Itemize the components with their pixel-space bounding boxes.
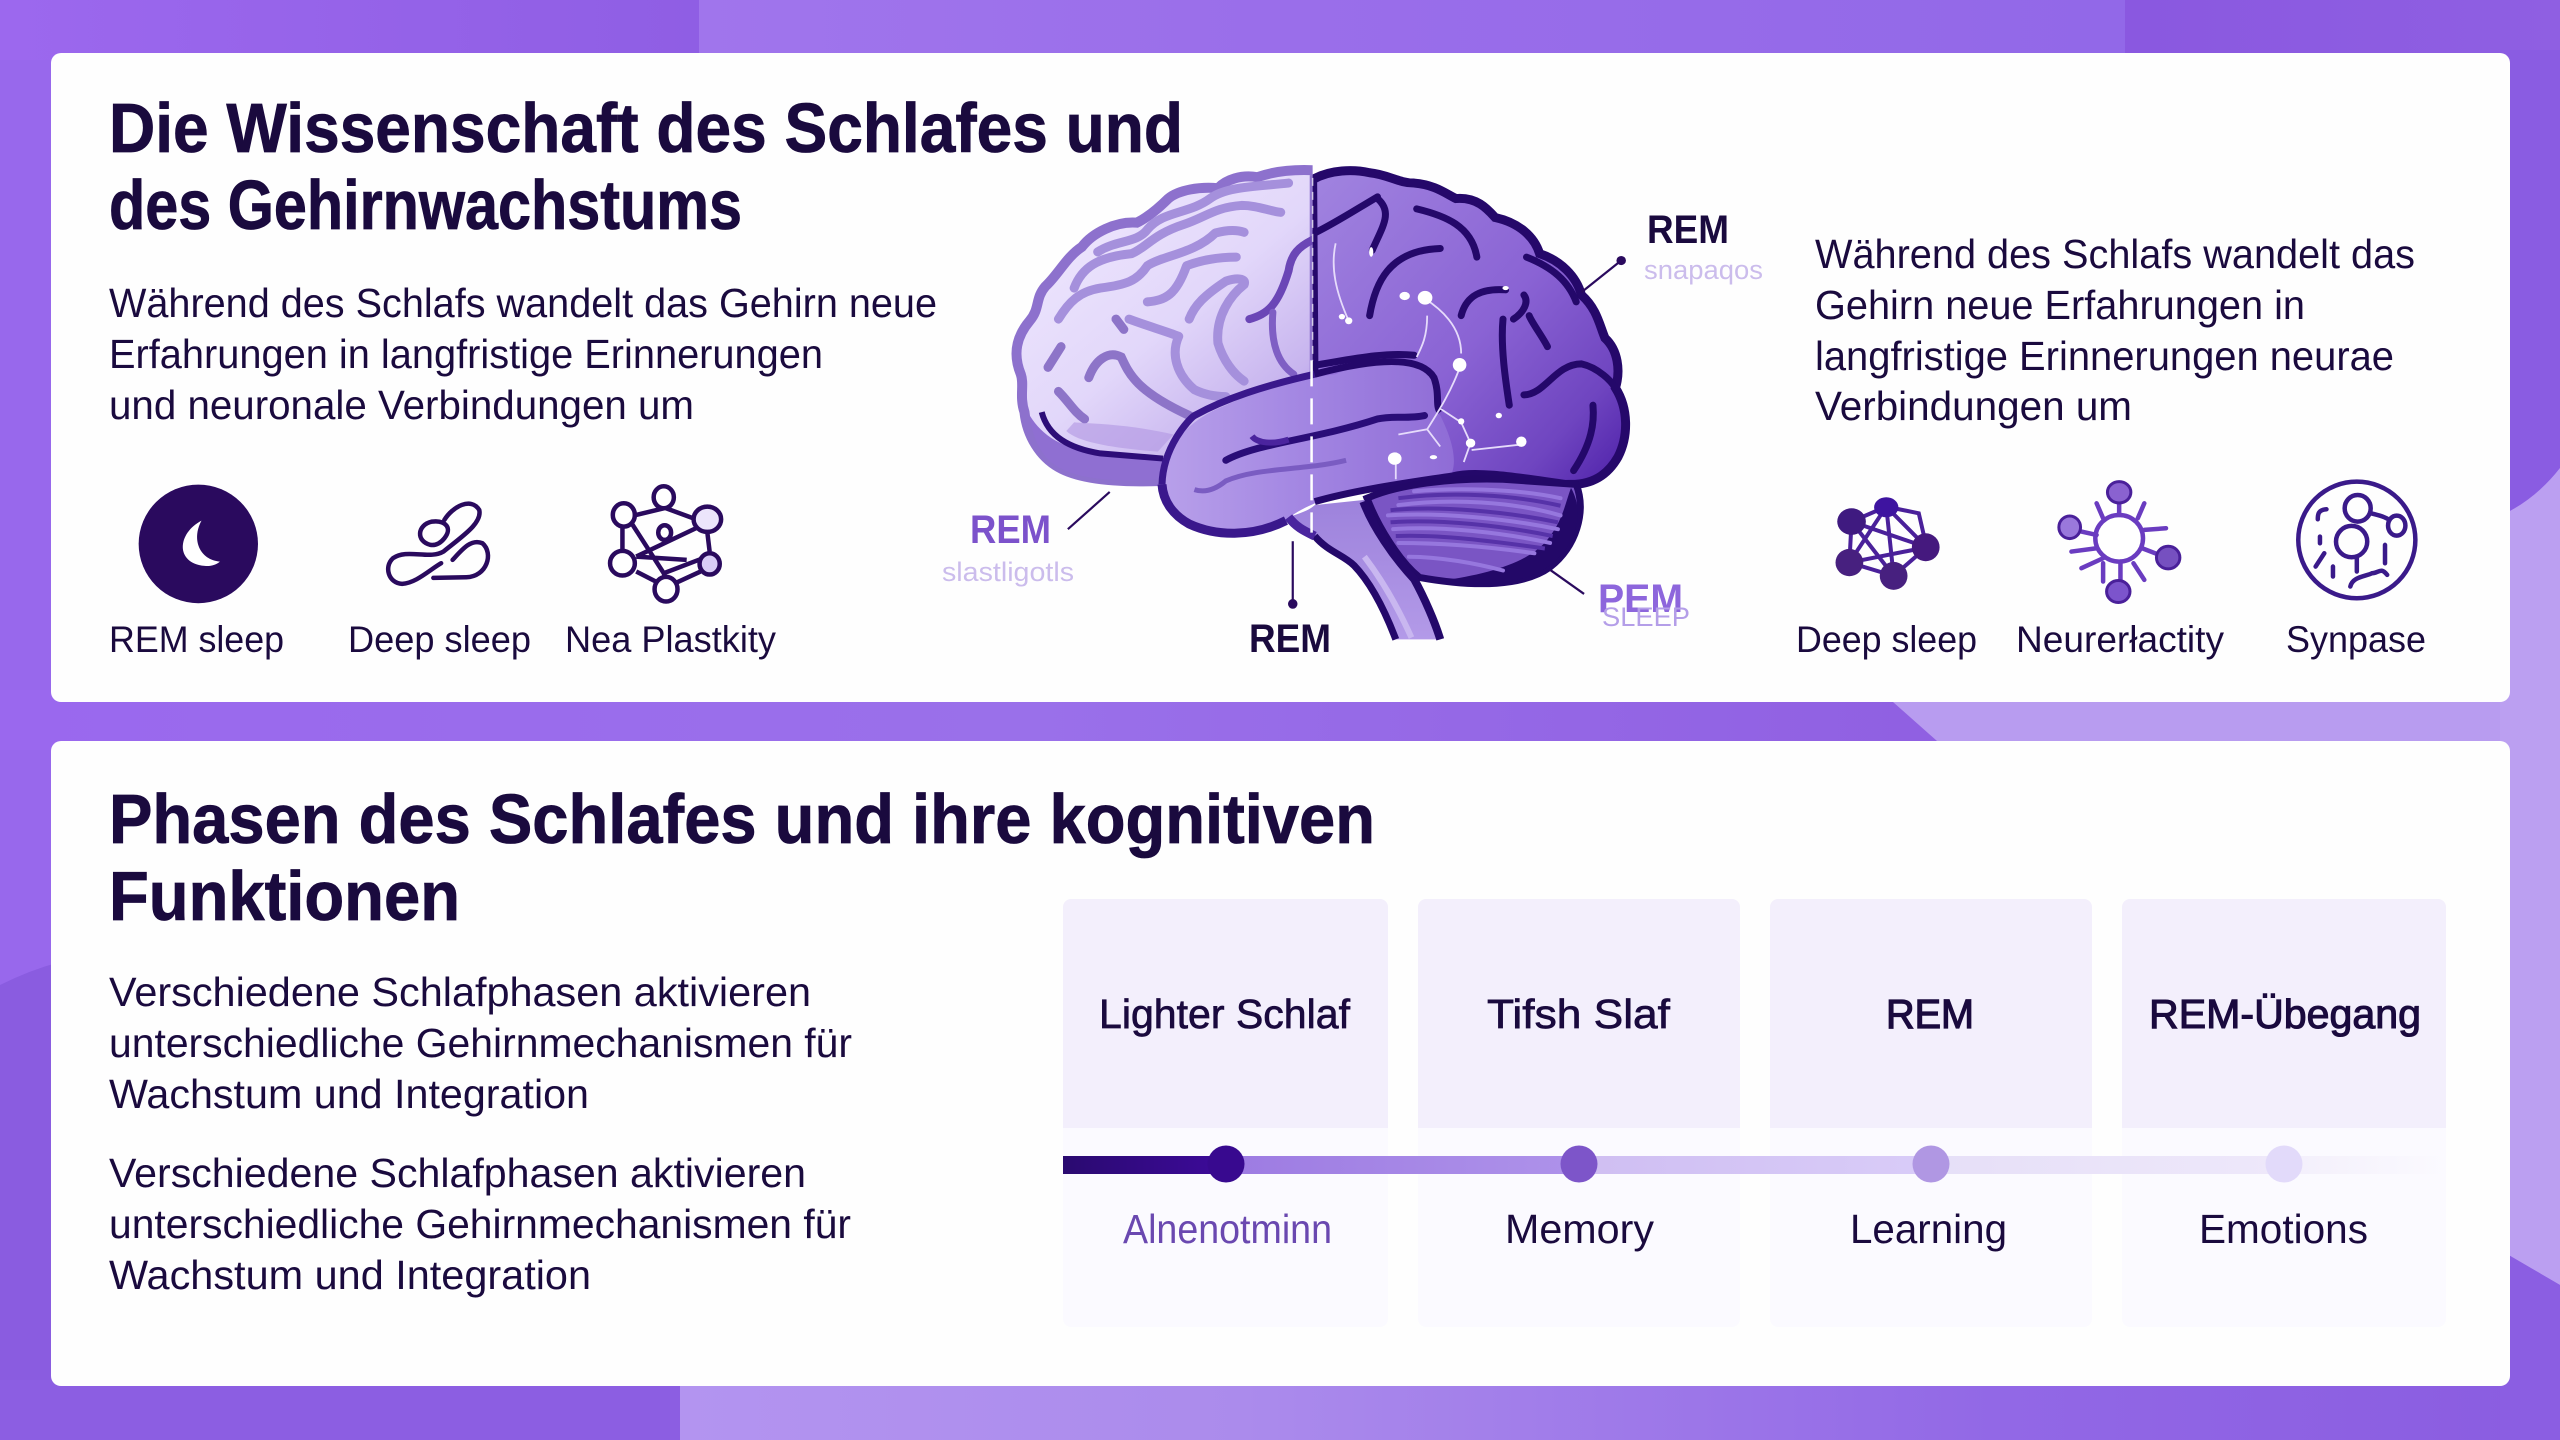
cerebellum xyxy=(1367,479,1580,584)
brain label: REM left: slastligotls xyxy=(942,557,1074,587)
text block: first paragraph xyxy=(109,969,852,1117)
leader lines xyxy=(1068,257,1625,608)
card: REM transition xyxy=(2122,899,2446,1128)
card: deep sleep xyxy=(1418,899,1740,1128)
label: learning: Learning xyxy=(1850,1206,2007,1252)
icon: neuron xyxy=(2059,482,2180,603)
text block: second paragraph: unterschiedliche Gehirnmechanismen für xyxy=(109,1201,851,1247)
text block: left intro xyxy=(109,280,937,428)
label: REM sleep: REM sleep xyxy=(109,619,284,660)
heading: sleep phases: Phasen des Schlafes und ihre kognitiven xyxy=(109,780,1375,858)
label: neural plasticity: Nea Plastkity xyxy=(565,619,776,660)
heading: science of sleep: Die Wissenschaft des Schlafes und xyxy=(109,89,1183,167)
text block: second paragraph: Wachstum und Integration xyxy=(109,1252,591,1298)
label: deep sleep right: Deep sleep xyxy=(1796,619,1977,660)
heading: sleep phases xyxy=(109,780,1375,935)
panel: top section xyxy=(51,53,2510,702)
illustration: brain xyxy=(1016,170,1626,639)
brain label: REM left: REM xyxy=(970,508,1051,552)
temporal lobe xyxy=(1162,362,1571,533)
icon: synapse circle xyxy=(2298,482,2415,598)
brain label: REM left xyxy=(942,508,1074,587)
label: emotions: Emotions xyxy=(2199,1206,2368,1252)
text block: second paragraph: Verschiedene Schlafphasen aktivieren xyxy=(109,1150,806,1196)
timeline xyxy=(1063,1146,2446,1182)
synapse highlights xyxy=(1334,243,1527,479)
icon: moon REM sleep xyxy=(139,485,258,603)
label: deep sleep: Deep sleep xyxy=(348,619,531,660)
text block: right intro: langfristige Erinnerungen neurae xyxy=(1815,333,2394,379)
brainstem xyxy=(1289,500,1440,639)
text block: first paragraph: Verschiedene Schlafphasen aktivieren xyxy=(109,969,811,1015)
brain left half xyxy=(1016,170,1315,484)
icon: dark network xyxy=(1836,497,1940,590)
brain label: REM top right: REM xyxy=(1647,208,1729,252)
card: light sleep: Lighter Schlaf xyxy=(1099,991,1351,1037)
brain label: REM top right xyxy=(1644,208,1763,285)
card: REM xyxy=(1770,899,2092,1128)
card: REM: REM xyxy=(1886,991,1974,1037)
heading: sleep phases: Funktionen xyxy=(109,857,460,935)
text block: right intro: Verbindungen um xyxy=(1815,383,2132,429)
label: neuroplasticity: Neurerłactity xyxy=(2016,619,2224,660)
brain label: REM top right: snapaqos xyxy=(1644,255,1763,285)
text block: second paragraph xyxy=(109,1150,851,1298)
card lower backgrounds xyxy=(1063,1110,2446,1327)
dashed divider xyxy=(1312,178,1313,533)
card: light sleep xyxy=(1063,899,1388,1128)
text block: right intro: Gehirn neue Erfahrungen in xyxy=(1815,282,2305,328)
icon: neural network xyxy=(610,486,721,602)
brain right half xyxy=(1313,171,1626,488)
text block: right intro: Während des Schlafs wandelt das xyxy=(1815,231,2415,277)
label: memory: Memory xyxy=(1505,1206,1654,1252)
card: deep sleep: Tifsh Slaf xyxy=(1487,991,1671,1037)
text block: left intro: Erfahrungen in langfristige Erinnerungen xyxy=(109,331,823,377)
label: synapse: Synpase xyxy=(2286,619,2426,660)
brain label: REM bottom right: SLEEP xyxy=(1602,602,1690,632)
text block: left intro: und neuronale Verbindungen um xyxy=(109,382,694,428)
card: REM transition: REM-Übegang xyxy=(2149,991,2421,1037)
text block: left intro: Während des Schlafs wandelt das Gehirn neue xyxy=(109,280,937,326)
brain label: REM bottom: REM xyxy=(1249,617,1331,661)
icon: deep sleep figure xyxy=(388,504,488,584)
text block: first paragraph: unterschiedliche Gehirnmechanismen für xyxy=(109,1020,852,1066)
heading: science of sleep: des Gehirnwachstums xyxy=(109,166,742,244)
heading: science of sleep xyxy=(109,89,1183,244)
panel: bottom section xyxy=(51,741,2510,1386)
label: hormones: Alnenotminn xyxy=(1123,1206,1332,1252)
text block: first paragraph: Wachstum und Integration xyxy=(109,1071,589,1117)
text block: right intro xyxy=(1815,231,2415,429)
brain label: REM bottom right: PEM xyxy=(1598,577,1683,621)
